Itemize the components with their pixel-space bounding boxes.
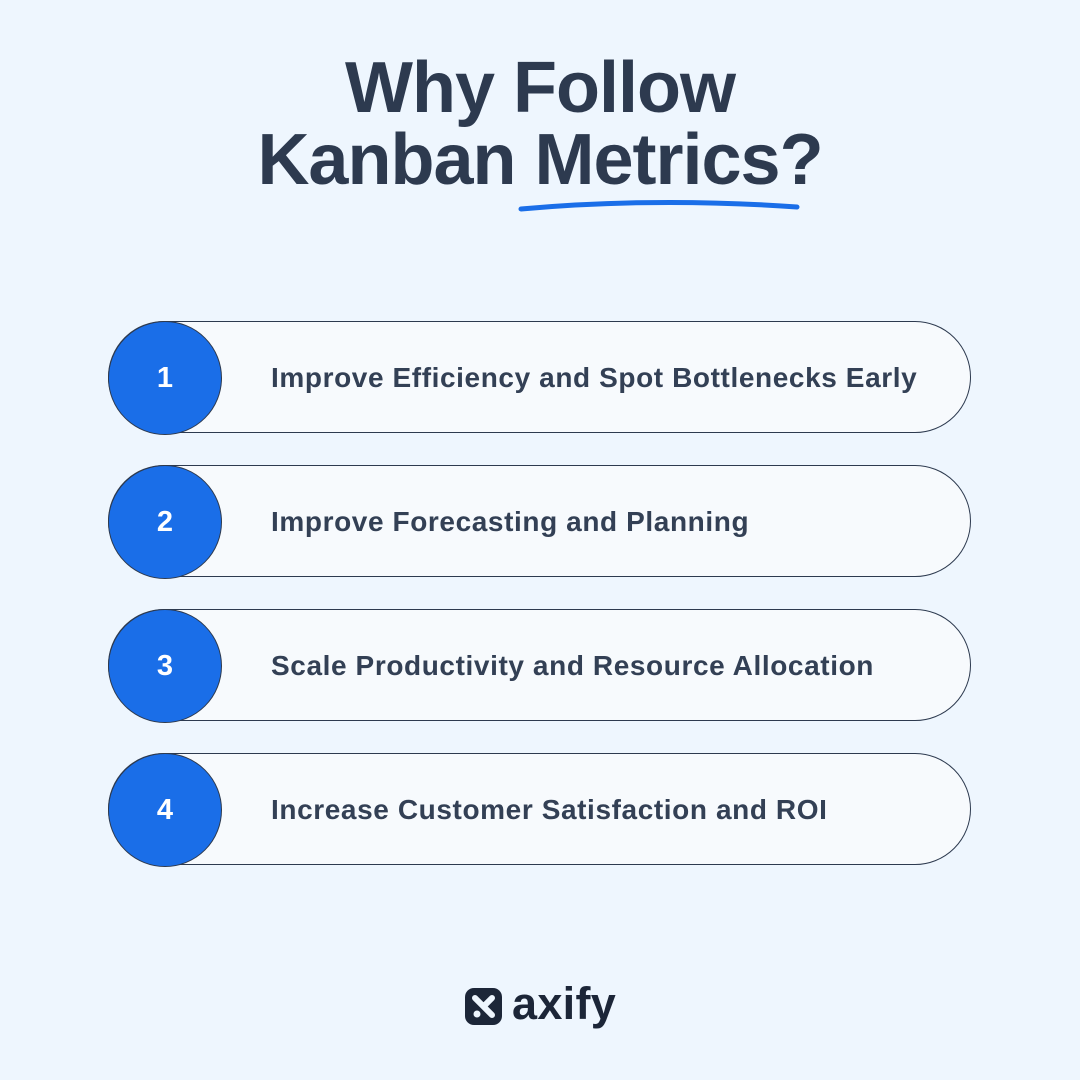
item 1: Improve Efficiency and Spot Bottlenecks Early — [271, 362, 917, 393]
item 4: 4 — [157, 794, 173, 826]
item 3 — [108, 609, 971, 721]
item 4 — [108, 753, 971, 865]
item 3: 3 — [157, 650, 173, 682]
item 2 — [108, 465, 971, 577]
icon: axify mark — [465, 988, 502, 1025]
logo: axify — [465, 978, 616, 1029]
item 1: 1 — [157, 362, 173, 394]
underline under Metrics — [518, 200, 800, 212]
title: Why Follow — [345, 48, 735, 128]
item 2: Improve Forecasting and Planning — [271, 506, 749, 537]
title — [257, 48, 823, 200]
item 1 — [108, 321, 971, 433]
item 4: Increase Customer Satisfaction and ROI — [271, 794, 828, 825]
logo text: axify — [512, 978, 616, 1029]
item 3: Scale Productivity and Resource Allocation — [271, 650, 874, 681]
title: Kanban Metrics? — [257, 120, 823, 200]
item 2: 2 — [157, 506, 173, 538]
